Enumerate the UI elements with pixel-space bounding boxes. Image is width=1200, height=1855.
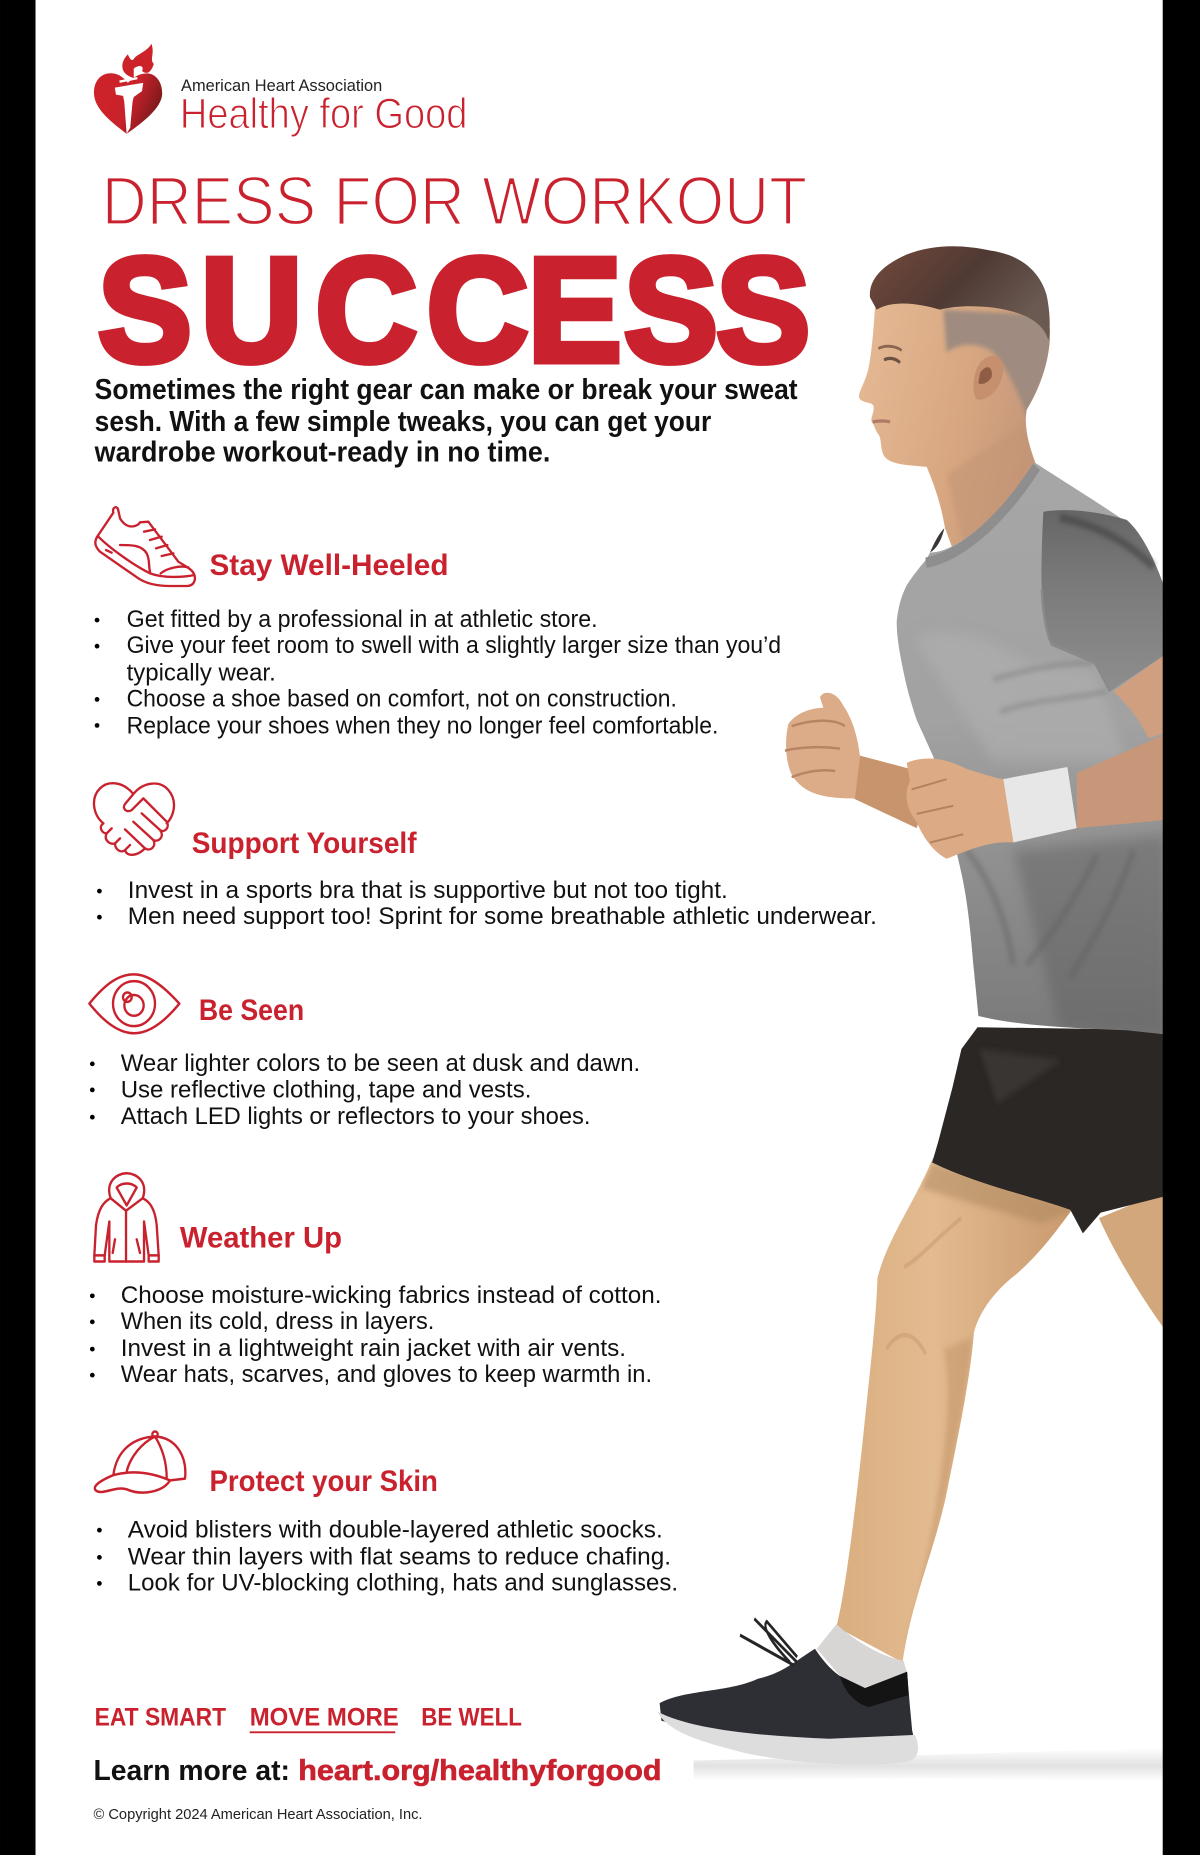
ground shadow xyxy=(694,1748,1165,1781)
right black bar xyxy=(1163,0,1200,1855)
front fist xyxy=(907,759,1013,859)
footer tagline: Eat Smart, Move More, Be Well: EAT SMART xyxy=(95,1704,226,1731)
bullet list: Avoid blisters with double-layered athletic soocks. xyxy=(128,1517,663,1543)
bullet list xyxy=(97,878,877,930)
bullet list: typically wear. xyxy=(127,660,276,686)
copyright: © Copyright 2024 American Heart Association, Inc. xyxy=(93,1807,422,1823)
rear fist xyxy=(786,693,860,798)
sleeve xyxy=(1041,510,1165,691)
bullet list: Look for UV-blocking clothing, hats and sunglasses. xyxy=(128,1571,678,1597)
photo: runner xyxy=(657,246,1165,1781)
bullet list: Wear lighter colors to be seen at dusk and dawn. xyxy=(121,1051,640,1077)
upper body xyxy=(785,246,1165,1034)
learn more link: Learn more at: xyxy=(93,1755,290,1787)
rear upper arm xyxy=(1113,655,1165,738)
sock xyxy=(817,1624,908,1688)
bullet list xyxy=(90,1051,640,1130)
logo text: American Heart Association xyxy=(181,76,382,95)
icon: baseball cap xyxy=(95,1431,185,1493)
bullet list: Get fitted by a professional in at athletic store. xyxy=(127,607,598,633)
logo: American Heart Association Healthy for Good xyxy=(94,44,467,138)
front forearm xyxy=(853,755,933,828)
bullet list: Choose a shoe based on comfort, not on construction. xyxy=(127,686,677,712)
bullet list: Wear thin layers with flat seams to reduce chafing. xyxy=(128,1544,671,1570)
icon: handshake heart xyxy=(94,783,174,855)
shoe laces xyxy=(740,1619,797,1665)
bullet list xyxy=(95,607,781,740)
title: SUCCESS xyxy=(98,227,810,393)
bullet list: When its cold, dress in layers. xyxy=(121,1309,434,1335)
panel: Protect your Skin xyxy=(95,1431,678,1597)
bullet list: Attach LED lights or reflectors to your shoes. xyxy=(121,1104,591,1130)
heading: Support Yourself xyxy=(192,827,417,860)
bullet list: Invest in a lightweight rain jacket with air vents. xyxy=(121,1336,626,1362)
footer tagline: Eat Smart, Move More, Be Well xyxy=(95,1704,522,1733)
bullet list: Use reflective clothing, tape and vests. xyxy=(121,1078,531,1104)
intro text: sesh. With a few simple tweaks, you can get your xyxy=(95,406,711,438)
lower body xyxy=(657,1027,1165,1781)
bullet list: Replace your shoes when they no longer feel comfortable. xyxy=(127,714,718,740)
bullet list xyxy=(97,1517,678,1597)
panel: Support Yourself xyxy=(94,783,877,930)
icon: hooded jacket xyxy=(94,1173,159,1261)
rear forearm xyxy=(1077,734,1165,828)
back leg xyxy=(1099,1191,1165,1330)
intro text xyxy=(94,374,798,469)
bullet list xyxy=(90,1283,662,1388)
panel: Be Seen xyxy=(89,974,640,1130)
brow, eye and mouth xyxy=(878,346,902,350)
heading: Be Seen xyxy=(199,994,304,1027)
bullet list: Wear hats, scarves, and gloves to keep warmth in. xyxy=(121,1362,652,1388)
bullet list: Invest in a sports bra that is supportive but not too tight. xyxy=(128,878,728,904)
panel: Weather Up xyxy=(90,1173,662,1388)
left black bar xyxy=(0,0,36,1855)
bullet list: Choose moisture-wicking fabrics instead of cotton. xyxy=(121,1283,662,1309)
intro text: Sometimes the right gear can make or break your sweat xyxy=(95,374,798,406)
shirt collar xyxy=(926,467,1037,563)
heading: Weather Up xyxy=(180,1221,342,1254)
heading: Protect your Skin xyxy=(209,1465,438,1498)
icon: eye xyxy=(89,974,179,1033)
icon: heart and torch xyxy=(94,44,162,134)
icon: running shoe xyxy=(95,507,195,586)
bullet list: Give your feet room to swell with a slightly larger size than you’d xyxy=(127,633,781,659)
learn more link: heart.org/healthyforgood xyxy=(298,1755,662,1787)
hair xyxy=(870,246,1050,340)
heading: Stay Well-Heeled xyxy=(209,549,449,582)
footer tagline: Eat Smart, Move More, Be Well: BE WELL xyxy=(421,1704,522,1731)
learn more link xyxy=(93,1755,662,1787)
title: DRESS FOR WORKOUT xyxy=(102,162,807,239)
logo: American Heart Association Healthy for Good: Healthy for Good xyxy=(180,90,467,138)
intro text: wardrobe workout-ready in no time. xyxy=(94,437,550,469)
shoe xyxy=(660,1649,916,1746)
front leg xyxy=(836,1158,1074,1662)
ear xyxy=(974,356,1003,400)
footer tagline: Eat Smart, Move More, Be Well: MOVE MORE xyxy=(250,1704,399,1731)
wristband xyxy=(1003,767,1077,842)
neck and face xyxy=(859,291,1050,569)
shaved side of head xyxy=(943,310,1053,557)
shirt xyxy=(897,463,1165,1034)
panel: Stay Well-Heeled xyxy=(95,507,781,740)
shorts xyxy=(932,1027,1165,1233)
bullet list: Men need support too! Sprint for some breathable athletic underwear. xyxy=(128,904,877,930)
